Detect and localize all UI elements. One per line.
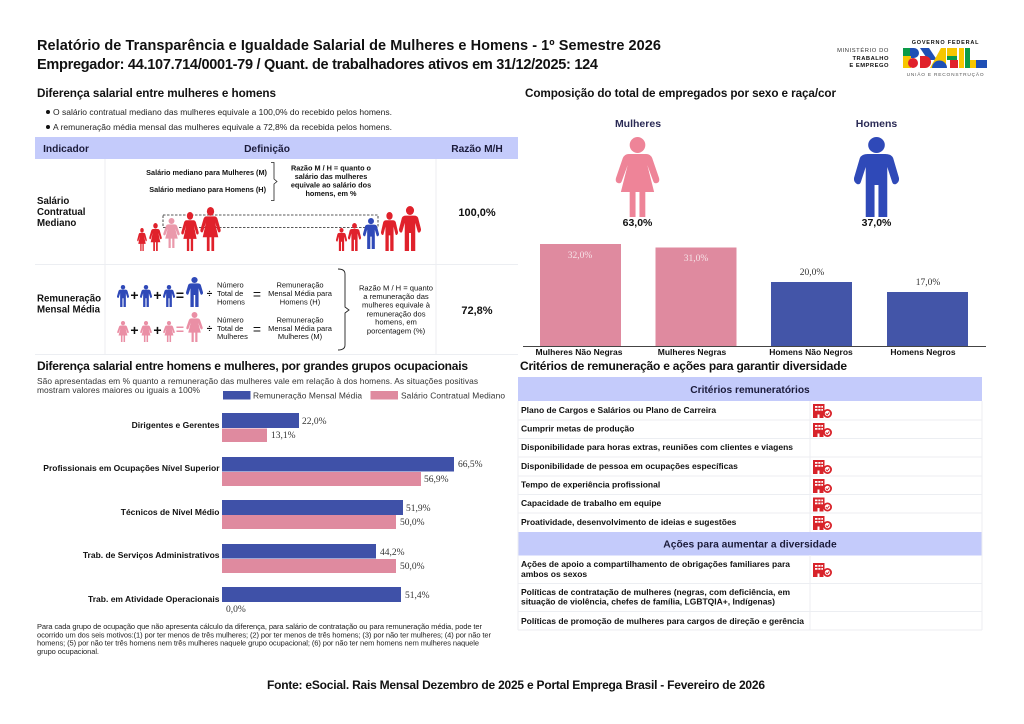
list: critérios: Tempo de experiência profissional <box>521 480 660 490</box>
icon: mulheres 63%: 63,0% <box>623 217 653 229</box>
text block: destaques <box>46 107 392 132</box>
bar chart: grupos ocupacionais: 13,1% <box>271 431 296 441</box>
icon: homens 37% <box>854 118 899 229</box>
table header: Definição <box>244 144 290 155</box>
fórmula mulheres: Total de <box>217 324 243 333</box>
bar chart: composição: Homens Não Negros <box>769 347 853 357</box>
row: salário contratual mediano <box>37 162 496 251</box>
fórmula mulheres: Remuneração <box>276 316 324 324</box>
list: critérios: Capacidade de trabalho em equipe <box>521 498 662 508</box>
list: critérios: Disponibilidade de pessoa em ocupações específicas <box>521 461 738 471</box>
text block: explicação: mostram valores maiores ou iguais a 100% <box>37 385 201 395</box>
bar chart: grupos ocupacionais: 50,0% <box>400 518 425 528</box>
fórmula homens: Remuneração <box>276 280 324 290</box>
fórmula homens: Homens (H) <box>280 298 321 306</box>
row: remuneração mensal média: Mensal Média <box>37 304 101 316</box>
fórmula mulheres: Mulheres <box>217 332 248 341</box>
legend <box>223 390 505 400</box>
list: ações: ambos os sexos <box>521 569 587 579</box>
text block: nota de rodapé <box>37 622 492 656</box>
row: remuneração mensal média: a remuneração das <box>363 292 429 301</box>
fórmula mulheres: + <box>153 322 162 338</box>
bar chart: grupos ocupacionais: Dirigentes e Gerentes <box>132 420 220 430</box>
row: salário contratual mediano: salário das mulheres <box>295 172 367 181</box>
bar chart: grupos ocupacionais: 56,9% <box>424 475 449 485</box>
list: ações: Ações de apoio a compartilhamento de obrigações familiares para <box>521 559 790 569</box>
table header: Razão M/H <box>451 144 503 155</box>
fonte: Fonte: eSocial. Rais Mensal Dezembro de 2025 e Portal Emprega Brasil - Fevereiro de 2026 <box>267 678 765 692</box>
fórmula mulheres <box>117 312 333 342</box>
bar chart: grupos ocupacionais: 66,5% <box>458 460 483 470</box>
bar chart: grupos ocupacionais: 22,0% <box>302 417 327 427</box>
bar chart: grupos ocupacionais: Técnicos de Nível Médio <box>121 507 220 517</box>
fórmula homens: = <box>253 286 261 302</box>
text block: nota de rodapé: ocorrido um dos seis motivos:(1) por ter menos de três mulheres; (2) por ter menos de três homens; (3) por não ter mulheres; (4) por não ter <box>37 630 492 640</box>
panel: tabela de indicadores <box>35 137 518 354</box>
list: critérios: Plano de Cargos e Salários ou Plano de Carreira <box>521 405 716 415</box>
text block: explicação: São apresentadas em % quanto a remuneração das mulheres vale em relação à dos homens. As situações positivas <box>37 376 478 386</box>
fórmula homens: Total de <box>217 289 243 298</box>
list: ações: situação de violência, chefes de família, LGBTQIA+, Indígenas) <box>521 596 775 606</box>
heading: diferença por grupos ocupacionais: Diferença salarial entre homens e mulheres, por grandes grupos ocupacionais <box>37 359 468 373</box>
row: salário contratual mediano: Salário mediano para Homens (H) <box>149 185 267 194</box>
logo: ministério e governo federal: UNIÃO E RECONSTRUÇÃO <box>907 71 984 78</box>
row: salário contratual mediano: Mediano <box>37 218 76 229</box>
bar chart: grupos ocupacionais: 0,0% <box>226 605 246 615</box>
bar chart: composição: 31,0% <box>684 254 708 264</box>
bar chart: grupos ocupacionais: 51,9% <box>406 504 431 514</box>
fórmula mulheres: Mensal Média para <box>268 324 333 333</box>
fórmula homens: Mensal Média para <box>268 289 333 298</box>
logo: ministério e governo federal: MINISTÉRIO DO <box>837 47 889 54</box>
fórmula mulheres: ÷ <box>207 324 213 335</box>
list: critérios: Disponibilidade para horas extras, reuniões com clientes e viagens <box>521 442 793 452</box>
row: salário contratual mediano: Salário mediano para Mulheres (M) <box>146 168 268 177</box>
text block: nota de rodapé: Para cada grupo de ocupação que não apresenta cálculo da diferença, para salário de contratação ou para remuneração média, pode ter <box>37 622 482 631</box>
text block: nota de rodapé: homens; (5) por não ter três homens nem três mulheres naquele grupo ocupacional; (6) por não ter nem homens nem mulheres naquele <box>37 638 479 648</box>
fórmula homens: + <box>153 287 162 303</box>
row: salário contratual mediano: homens, em % <box>305 189 357 198</box>
fórmula homens: = <box>176 287 184 303</box>
title: Empregador: 44.107.714/0001-79 / Quant. de trabalhadores ativos em 31/12/2025: 124 <box>37 57 598 73</box>
panel: critérios remuneratórios e ações <box>518 377 982 630</box>
row: salário contratual mediano: Contratual <box>37 207 85 218</box>
row: remuneração mensal média: 72,8% <box>461 305 493 317</box>
bar chart: composição: Homens Negros <box>890 347 956 357</box>
icons: critérios marcados <box>813 404 831 577</box>
list: critérios <box>521 405 793 527</box>
logo: ministério e governo federal: GOVERNO FEDERAL <box>912 40 979 46</box>
row: salário contratual mediano: Razão M / H = quanto o <box>291 164 372 172</box>
icon: homens 37%: Homens <box>856 118 897 130</box>
heading: diferença salarial: Diferença salarial entre mulheres e homens <box>37 87 276 100</box>
row: remuneração mensal média: Razão M / H = quanto <box>359 284 433 292</box>
row: salário contratual mediano: 100,0% <box>458 207 496 219</box>
bar chart: grupos ocupacionais: 51,4% <box>405 591 430 601</box>
heading: critérios: Critérios de remuneração e ações para garantir diversidade <box>520 359 847 373</box>
table header: Indicador <box>43 144 89 155</box>
bar chart: grupos ocupacionais: 44,2% <box>380 548 405 558</box>
bar chart: grupos ocupacionais <box>43 413 483 615</box>
bar chart: composição: 20,0% <box>800 268 824 278</box>
legend: Remuneração Mensal Média <box>253 390 362 400</box>
fórmula mulheres: Mulheres (M) <box>278 332 323 341</box>
row: remuneração mensal média: remuneração dos <box>366 310 426 318</box>
fórmula mulheres: = <box>253 321 261 337</box>
legend: Salário Contratual Mediano <box>401 390 505 400</box>
icon: mulheres 63%: Mulheres <box>615 118 661 130</box>
list: critérios: Cumprir metas de produção <box>521 424 634 434</box>
fórmula homens: + <box>130 287 139 303</box>
title <box>37 38 661 73</box>
fórmula mulheres: = <box>176 321 184 337</box>
bar chart: composição: Mulheres Não Negras <box>536 347 623 357</box>
text block: nota de rodapé: grupo ocupacional. <box>37 647 99 656</box>
logo: ministério e governo federal: E EMPREGO <box>849 63 889 69</box>
icon: mulheres 63% <box>615 118 661 229</box>
title: Relatório de Transparência e Igualdade Salarial de Mulheres e Homens - 1º Semestre 2026 <box>37 38 661 54</box>
row: remuneração mensal média <box>37 269 493 350</box>
fórmula homens: Número <box>217 280 244 290</box>
heading: composição: Composição do total de empregados por sexo e raça/cor <box>525 87 836 100</box>
logo: ministério e governo federal: TRABALHO <box>852 56 889 62</box>
row: remuneração mensal média: homens, em <box>375 318 417 326</box>
row: remuneração mensal média: porcentagem (%) <box>367 326 426 336</box>
bar chart: grupos ocupacionais: Trab. em Atividade Operacionais <box>88 594 220 604</box>
section header: Ações para aumentar a diversidade <box>663 540 837 550</box>
bar chart: composição <box>523 244 986 357</box>
icons: homens por salário <box>336 206 421 251</box>
icon: homens 37%: 37,0% <box>862 217 892 229</box>
row: salário contratual mediano: equivale ao salário dos <box>291 180 371 190</box>
section header: Critérios remuneratórios <box>690 385 810 396</box>
list: ações <box>521 559 804 626</box>
bar chart: composição: Mulheres Negras <box>658 347 727 357</box>
bar chart: grupos ocupacionais: Profissionais em Ocupações Nível Superior <box>43 463 220 473</box>
bar chart: composição: 17,0% <box>916 278 940 288</box>
row: remuneração mensal média: Remuneração <box>37 294 101 304</box>
fórmula mulheres: + <box>130 322 139 338</box>
list: critérios: Proatividade, desenvolvimento de ideias e sugestões <box>521 517 737 527</box>
fórmula mulheres: Número <box>217 316 244 324</box>
row: salário contratual mediano: Salário <box>37 196 69 207</box>
table header <box>43 144 503 155</box>
fórmula homens: Homens <box>217 298 245 306</box>
text block: explicação <box>37 376 478 395</box>
list: ações: Políticas de promoção de mulheres para cargos de direção e gerência <box>521 616 804 626</box>
icons: mulheres por salário <box>137 207 221 251</box>
fórmula homens: ÷ <box>207 289 213 300</box>
logo: ministério e governo federal <box>837 40 987 78</box>
bar chart: grupos ocupacionais: Trab. de Serviços Administrativos <box>83 550 220 560</box>
text block: destaques: O salário contratual mediano das mulheres equivale a 100,0% do recebido pelos homens. <box>53 107 392 117</box>
bar chart: composição: 32,0% <box>568 251 592 261</box>
list: ações: Políticas de contratação de mulheres (negras, com deficiência, em <box>521 587 790 597</box>
bar chart: grupos ocupacionais: 50,0% <box>400 562 425 572</box>
row: remuneração mensal média: mulheres equivale à <box>362 300 431 310</box>
fórmula homens <box>117 277 333 307</box>
text block: destaques: A remuneração média mensal das mulheres equivale a 72,8% da recebida pelos homens. <box>53 122 392 132</box>
